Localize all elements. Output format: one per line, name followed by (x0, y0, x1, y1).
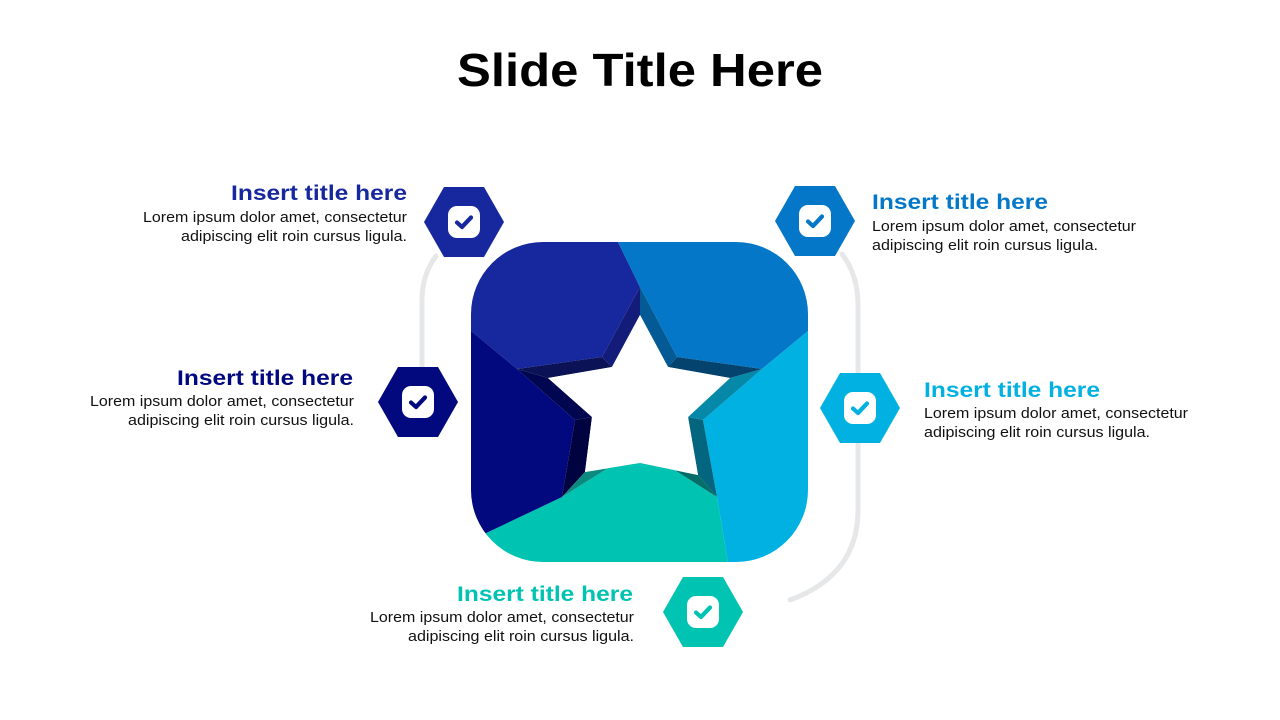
text: bottom (370, 583, 634, 645)
text: top-right: Lorem ipsum dolor amet, consectetur (872, 219, 1136, 235)
text: left: Insert title here (177, 367, 353, 390)
segment: right (703, 331, 808, 562)
title: Slide Title Here (457, 44, 823, 96)
connector lines (422, 254, 858, 600)
text: top-left: Insert title here (231, 182, 407, 205)
segment: left (471, 331, 575, 534)
text: left (90, 367, 354, 429)
text: bottom: Lorem ipsum dolor amet, consectetur (370, 610, 634, 626)
text: right: Lorem ipsum dolor amet, consectetur (924, 406, 1188, 422)
text: right: adipiscing elit roin cursus ligula. (924, 425, 1150, 441)
text: bottom: Insert title here (457, 583, 633, 606)
text: top-left: Lorem ipsum dolor amet, consectetur (143, 210, 407, 226)
text: left: adipiscing elit roin cursus ligula. (128, 413, 354, 429)
text: right (924, 379, 1188, 441)
text: right: Insert title here (924, 379, 1100, 402)
text: top-right: adipiscing elit roin cursus ligula. (872, 238, 1098, 254)
text: top-left (143, 182, 407, 245)
text: top-left: adipiscing elit roin cursus ligula. (181, 229, 407, 245)
center star diagram (471, 242, 808, 562)
text: top-right: Insert title here (872, 191, 1048, 214)
text: left: Lorem ipsum dolor amet, consectetur (90, 394, 354, 410)
bevels (517, 287, 762, 497)
icon: hex top-right (775, 186, 855, 256)
icon: hex left (378, 367, 458, 437)
icon: hex bottom (663, 577, 743, 647)
text: bottom: adipiscing elit roin cursus ligula. (408, 629, 634, 645)
text: top-right (872, 191, 1136, 254)
white star (548, 315, 730, 475)
icon: hex right (820, 373, 900, 443)
segment: top-left (471, 242, 640, 369)
icon: hex top-left (424, 187, 504, 257)
segment: bottom (486, 463, 728, 562)
segment: top-right (618, 242, 808, 369)
